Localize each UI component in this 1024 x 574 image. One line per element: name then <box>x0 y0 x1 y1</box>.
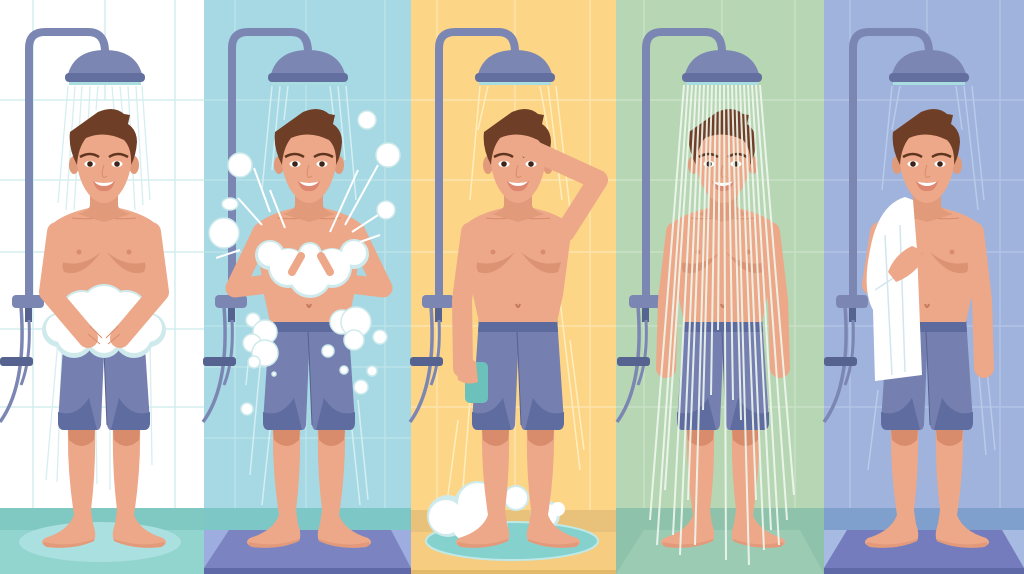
water spray 5 <box>868 86 995 470</box>
panel: drying with towel <box>824 0 1024 574</box>
arm hanging <box>462 232 471 368</box>
figure 1 <box>42 109 166 548</box>
panel 4 background wall <box>616 0 824 574</box>
foam cloud on belly <box>42 284 166 358</box>
panel 3 floor <box>411 510 616 574</box>
panel 4 floor <box>616 508 824 574</box>
panel: full rinse under water <box>616 0 824 574</box>
icon: shower fixture 2 <box>203 32 348 422</box>
heavy water streams <box>650 85 794 565</box>
hand on chest <box>888 246 922 282</box>
water spray 2 <box>246 86 368 505</box>
panel 2 floor and mat <box>204 508 411 574</box>
icon: shower fixture 3 <box>410 32 555 422</box>
arms bent over chest <box>235 232 383 288</box>
panel 1 floor <box>0 508 204 574</box>
panel 5 background wall <box>824 0 1024 574</box>
arm raised to head <box>528 148 598 232</box>
panel 5 floor and mat <box>824 508 1024 574</box>
panel: rinsing hair and feet foam <box>410 0 616 574</box>
icon: shower fixture 5 <box>824 32 969 422</box>
arm hanging <box>974 232 984 368</box>
sponge in hand <box>465 362 488 403</box>
icon: shower fixture 1 <box>0 32 145 422</box>
arm holding towel <box>872 232 880 285</box>
figure 3 <box>456 109 598 548</box>
bubbles and sparkle rays <box>209 111 400 415</box>
panel 2 background wall <box>204 0 411 574</box>
figure 2 <box>235 109 383 548</box>
foam tray at feet <box>426 481 598 560</box>
water spray 3 <box>448 86 584 500</box>
panel 1 background wall <box>0 0 204 574</box>
panel: washing the chest <box>203 0 411 574</box>
panel 3 background wall <box>411 0 616 574</box>
figure 4 <box>661 109 785 548</box>
towel <box>867 197 922 381</box>
icon: shower fixture 4 <box>617 32 762 422</box>
figure 5 <box>865 109 989 548</box>
foam on chest <box>255 239 369 298</box>
panel: lathering the belly <box>0 0 204 574</box>
arms over belly <box>49 232 159 338</box>
arms at sides <box>666 232 780 368</box>
water spray 1 <box>46 86 152 490</box>
